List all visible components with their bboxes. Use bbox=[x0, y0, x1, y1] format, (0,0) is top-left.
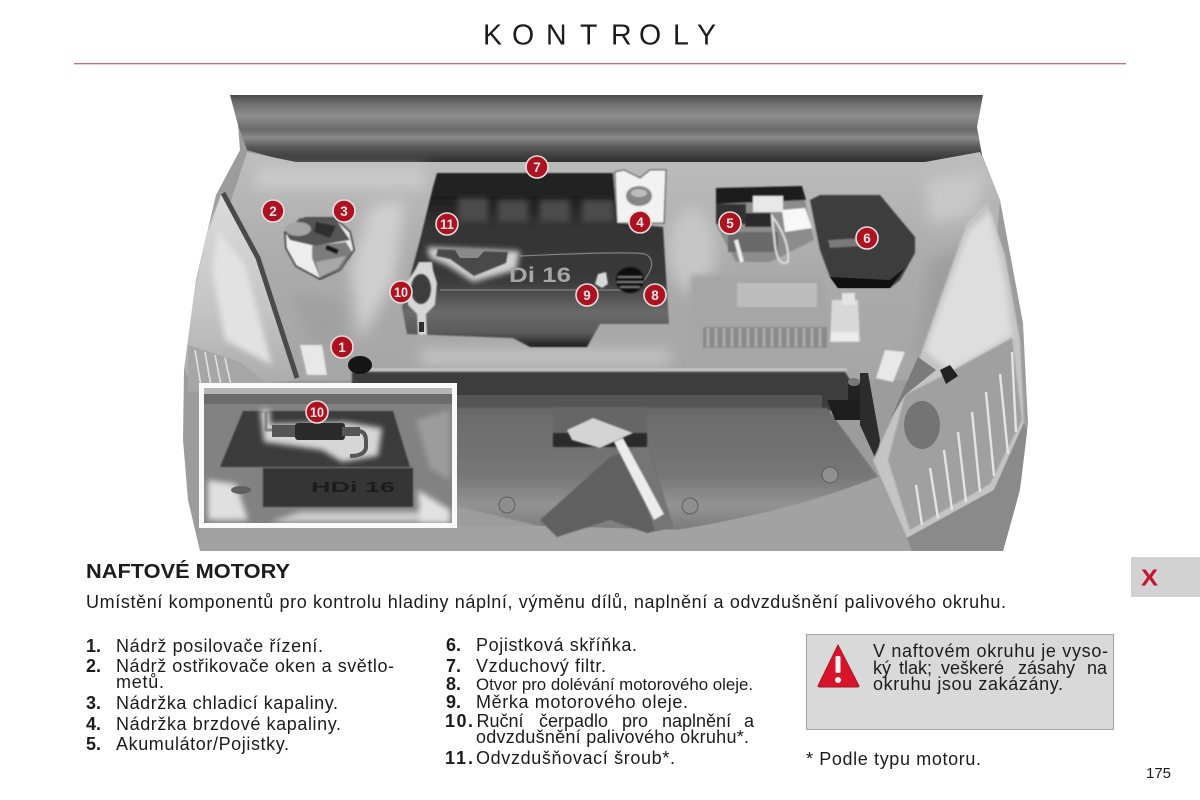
marker 5: 5 bbox=[726, 216, 734, 231]
marker 8: 8 bbox=[651, 288, 659, 303]
marker 11: 11 bbox=[440, 217, 454, 232]
marker 6 bbox=[856, 227, 878, 249]
warning text: tlak; bbox=[899, 658, 932, 678]
list right column: Pojistková skříňka. bbox=[476, 635, 637, 655]
left white label bbox=[300, 345, 327, 375]
"HDi 16" moulded lettering: Di 16 bbox=[509, 264, 571, 287]
inset photo: purge pump bbox=[199, 383, 457, 528]
section tab X: X bbox=[1141, 564, 1159, 590]
highlighted purge pump bbox=[406, 247, 520, 335]
inset glow and pipe bbox=[260, 410, 382, 462]
list left column: Nádrž posilovače řízení. bbox=[116, 636, 323, 656]
list right column: Měrka motorového oleje. bbox=[476, 692, 688, 712]
marker 6: 6 bbox=[863, 231, 871, 246]
list right column: pro bbox=[622, 711, 648, 731]
callout markers bbox=[262, 156, 878, 423]
battery bbox=[716, 186, 814, 263]
list left column: Nádržka brzdové kapaliny. bbox=[116, 714, 341, 734]
warning text: okruhu jsou zakázány. bbox=[873, 674, 1063, 694]
marker 4 bbox=[629, 211, 651, 233]
warning text: ký bbox=[873, 658, 891, 678]
list right column: 8. bbox=[446, 674, 461, 694]
list right column: Ruční bbox=[476, 711, 524, 731]
list left column: 5. bbox=[86, 734, 101, 754]
marker 8 bbox=[644, 284, 666, 306]
marker 2 bbox=[262, 200, 284, 222]
air box bbox=[690, 275, 905, 382]
inset photo: purge pump: HDi 16 bbox=[311, 479, 395, 496]
list right column: 10. bbox=[445, 711, 473, 731]
bonnet underside bbox=[230, 95, 983, 164]
title: KONTROLY bbox=[483, 20, 716, 52]
marker 7 bbox=[526, 156, 548, 178]
warning text: V naftovém okruhu je vyso- bbox=[873, 641, 1108, 661]
page number: 175 bbox=[1146, 765, 1171, 782]
warning text: na bbox=[1087, 658, 1108, 678]
strut stud bbox=[827, 373, 880, 462]
list right column: 6. bbox=[446, 635, 461, 655]
fuse box bbox=[810, 195, 915, 288]
list right column: Vzduchový filtr. bbox=[476, 656, 606, 676]
marker 11 bbox=[436, 213, 458, 235]
list right column: čerpadlo bbox=[539, 711, 608, 731]
list right column: Odvzdušňovací šroub*. bbox=[476, 748, 675, 768]
list left column: 3. bbox=[86, 693, 101, 713]
engine bay photo bbox=[180, 95, 1030, 551]
reservoir 2/3 bbox=[285, 218, 354, 279]
list right column: Otvor pro dolévání motorového oleje. bbox=[476, 675, 753, 694]
list right column: 7. bbox=[446, 656, 461, 676]
warning text: veškeré bbox=[941, 658, 1004, 678]
list left column bbox=[86, 636, 394, 754]
marker 3: 3 bbox=[340, 204, 348, 219]
latch handle bbox=[567, 418, 664, 520]
warning box bbox=[806, 634, 1114, 730]
brake reservoir bbox=[615, 170, 666, 223]
list right column: 9. bbox=[446, 692, 461, 712]
bonnet catch bbox=[540, 454, 673, 538]
title rule bbox=[74, 63, 1126, 64]
oil cap and dipstick bbox=[595, 267, 644, 293]
marker 1 bbox=[331, 336, 353, 358]
section tab X bbox=[1131, 557, 1200, 597]
warning text bbox=[873, 641, 1108, 694]
marker 10: 10 bbox=[394, 285, 408, 300]
engine cover bbox=[402, 173, 669, 347]
marker 2: 2 bbox=[269, 204, 277, 219]
lower cowl panel bbox=[455, 408, 878, 530]
list left column: Nádržka chladicí kapaliny. bbox=[116, 693, 338, 713]
bumper bbox=[537, 477, 878, 531]
soft bay highlights bbox=[255, 168, 985, 364]
cowl dark strip bbox=[352, 372, 860, 412]
footnote: * Podle typu motoru. bbox=[806, 749, 981, 769]
list right column: naplnění bbox=[662, 711, 731, 731]
body base bbox=[180, 95, 1030, 551]
left headlight bbox=[184, 192, 298, 392]
list right column bbox=[445, 635, 755, 768]
marker 9: 9 bbox=[583, 288, 591, 303]
inset clutter bbox=[208, 410, 450, 523]
intro text: Umístění komponentů pro kontrolu hladiny náplní, výměnu dílů, naplnění a odvzdušnění palivového okruhu. bbox=[86, 592, 1006, 612]
list left column: metů. bbox=[116, 672, 164, 692]
marker 9 bbox=[576, 284, 598, 306]
right headlight bbox=[873, 203, 1030, 551]
marker 10 in inset bbox=[306, 401, 328, 423]
cover ribs bbox=[458, 198, 614, 222]
marker 7: 7 bbox=[533, 160, 541, 175]
heading: NAFTOVÉ MOTORY bbox=[86, 560, 291, 583]
list left column: 4. bbox=[86, 714, 101, 734]
marker 10 bbox=[390, 281, 412, 303]
engine bay background bbox=[215, 152, 1000, 380]
list right column: odvzdušnění palivového okruhu*. bbox=[476, 727, 749, 747]
list left column: 2. bbox=[86, 656, 101, 676]
warning text: zásahy bbox=[1018, 658, 1075, 678]
marker 10 in inset: 10 bbox=[310, 405, 324, 420]
list right column: a bbox=[744, 711, 755, 731]
inset engine cover bbox=[220, 411, 410, 467]
marker 4: 4 bbox=[636, 215, 644, 230]
list left column: Nádrž ostřikovače oken a světlo- bbox=[116, 656, 394, 676]
marker 3 bbox=[333, 200, 355, 222]
marker 5 bbox=[719, 212, 741, 234]
list left column: 1. bbox=[86, 636, 101, 656]
list left column: Akumulátor/Pojistky. bbox=[116, 734, 289, 754]
list right column: 11. bbox=[445, 748, 473, 768]
icon: warning triangle bbox=[818, 645, 859, 687]
marker 1: 1 bbox=[338, 340, 346, 355]
